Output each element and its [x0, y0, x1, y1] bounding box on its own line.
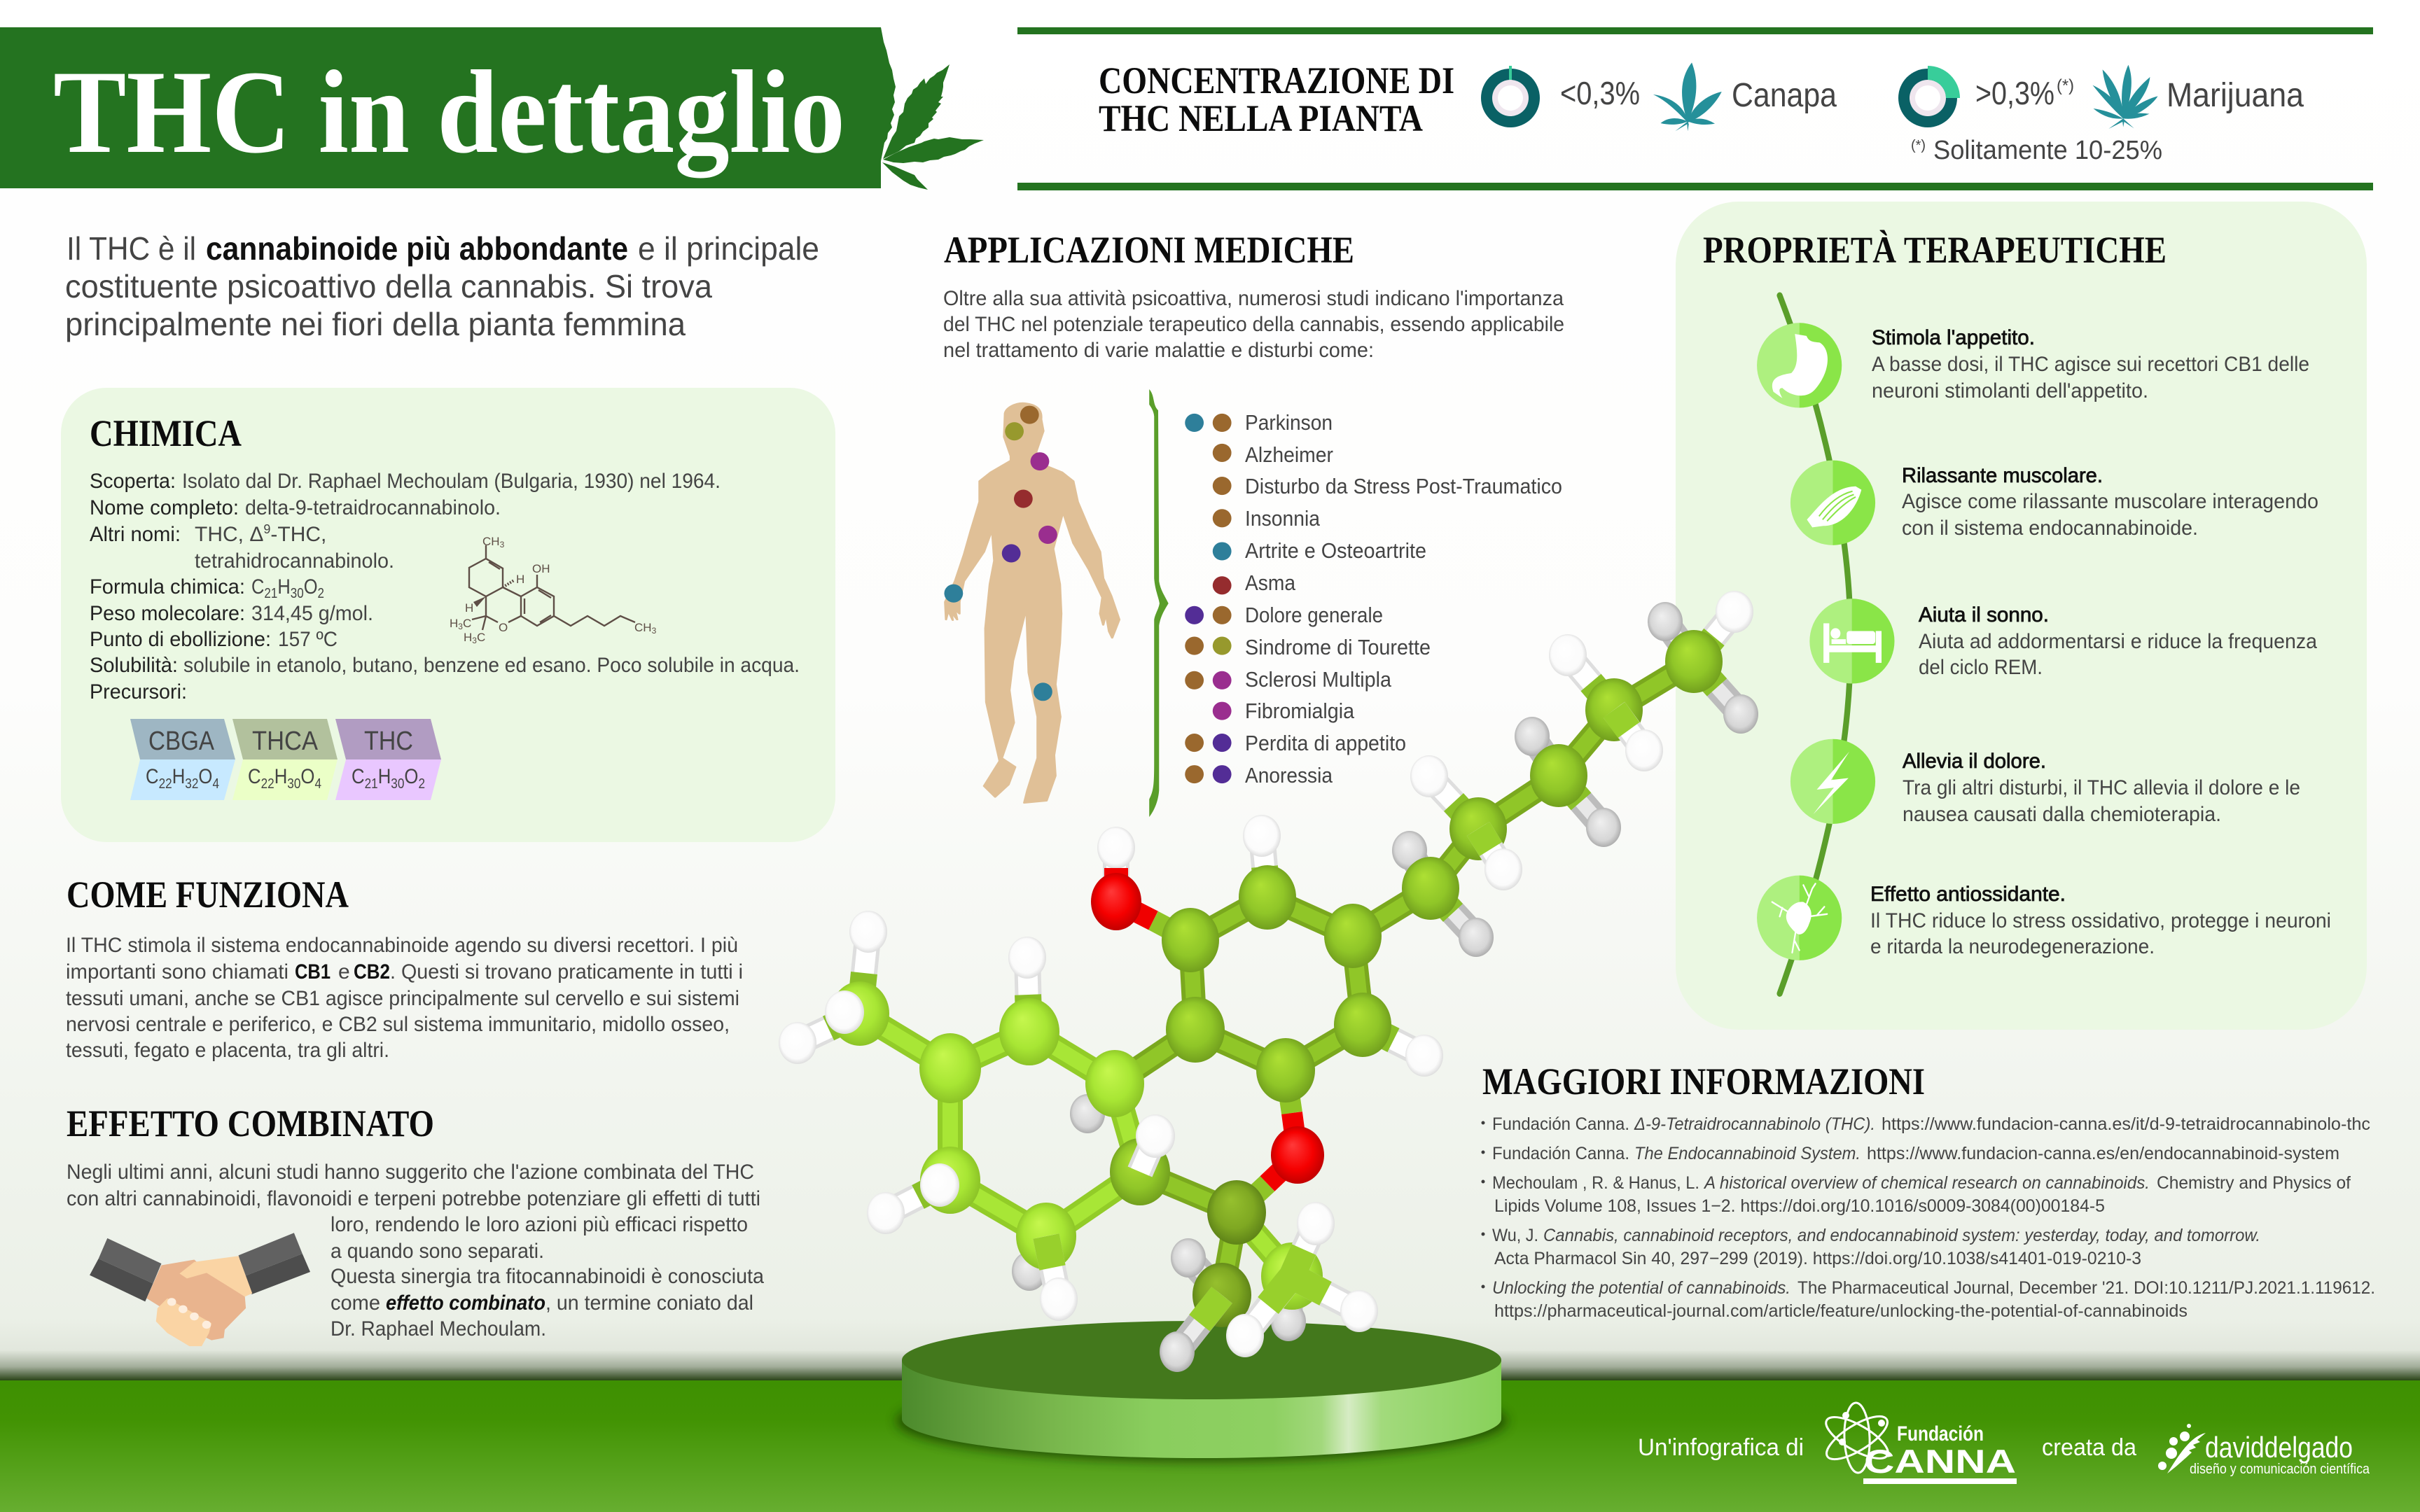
property: pain: [1903, 750, 2300, 826]
chemistry facts: 9: [263, 522, 270, 536]
back hydrogen bonds: [798, 612, 1741, 1322]
text: come funziona: CB1: [295, 960, 331, 983]
list of conditions: Parkinson: [1245, 410, 1333, 435]
chemistry facts: Solubilità:: [90, 654, 178, 677]
property: antioxidant: [1870, 883, 2331, 958]
intro text: [65, 230, 819, 342]
chart: skeletal formula of THC: H: [450, 617, 458, 630]
icon: hemp leaf: [1653, 62, 1722, 131]
heading: concentration: [1099, 59, 1454, 139]
logo: Fundación Canna: [1821, 1402, 2017, 1484]
precursor chevron: THCA: 4: [314, 776, 321, 792]
text: come funziona: e: [338, 960, 350, 983]
property: muscle relaxant: Rilassante muscolare.: [1902, 464, 2103, 487]
property: pain: Allevia il dolore.: [1903, 750, 2046, 773]
text: effetto combinato: come: [331, 1292, 380, 1315]
section: maggiori informazioni: [1482, 1060, 2375, 1321]
text: effetto combinato: effetto combinato: [386, 1292, 545, 1315]
property: appetite: Stimola l'appetito.: [1872, 326, 2035, 349]
carbon atoms: [830, 630, 1723, 1327]
chemistry facts: Nome completo:: [90, 496, 239, 519]
chemistry facts: O: [304, 575, 318, 598]
chart: skeletal formula of THC: 3: [652, 626, 657, 636]
icon: handshake: [90, 1233, 310, 1346]
carbon bond stubs toward back hydrogens: [828, 637, 1717, 1298]
list of conditions: Anoressia: [1245, 763, 1333, 788]
chemistry facts: 157 ºC: [278, 628, 338, 651]
banner with leaf edge: [0, 27, 896, 188]
chart: skeletal formula of THC: H: [465, 601, 473, 615]
property: muscle relaxant: Agisce come rilassante muscolare interagendo: [1902, 490, 2318, 513]
strip rules: [1017, 27, 2373, 190]
chemistry facts: 21: [264, 586, 277, 601]
text: effetto combinato: [67, 1161, 764, 1340]
reference list: Mechoulam , R. & Hanus, L.: [1492, 1173, 1699, 1193]
chemistry facts: Isolato dal Dr. Raphael Mechoulam (Bulgaria, 1930) nel 1964.: [182, 470, 721, 493]
chart: skeletal formula of THC: CH: [482, 535, 500, 548]
list of conditions: Dolore generale: [1245, 603, 1383, 627]
precursor chevron: THCA: [232, 719, 338, 800]
reference list: Acta Pharmacol Sin 40, 297−299 (2019). https://doi.org/10.1038/s41401-019-0210-3: [1494, 1249, 2141, 1268]
reference list: A historical overview of chemical research on cannabinoids.: [1703, 1173, 2150, 1193]
precursor chevron: CBGA: 32: [185, 776, 198, 792]
precursor chevron: THC: 2: [418, 776, 425, 792]
heading: effetto combinato: EFFETTO COMBINATO: [67, 1102, 434, 1144]
value: above 0.3 percent: (*): [2057, 76, 2074, 95]
list of conditions: Alzheimer: [1245, 442, 1333, 467]
chart: skeletal formula of THC: H: [464, 631, 472, 644]
text: effetto combinato: Negli ultimi anni, alcuni studi hanno suggerito che l'azione combinata del THC: [67, 1161, 754, 1184]
precursor chevron: THCA: THCA: [252, 727, 319, 756]
text: applicazioni intro: Oltre alla sua attività psicoattiva, numerosi studi indicano l'importanza: [943, 287, 1564, 310]
reference list: Fundación Canna.: [1492, 1114, 1629, 1134]
icon: marijuana leaf: [2093, 65, 2158, 129]
chart: skeletal formula of THC: H: [516, 573, 524, 586]
precursor chevron: THC: [335, 719, 441, 800]
reference list: Δ-9-Tetraidrocannabinolo (THC).: [1634, 1114, 1875, 1134]
intro text: principalmente nei fiori della pianta femmina: [65, 306, 686, 342]
property: appetite: A basse dosi, il THC agisce sui recettori CB1 delle: [1872, 353, 2309, 376]
intro text: e il principale: [638, 230, 819, 267]
text: come funziona: tessuti, fegato e placenta, tra gli altri.: [66, 1039, 389, 1062]
chemistry facts: Peso molecolare:: [90, 602, 245, 625]
property: pain: Tra gli altri disturbi, il THC allevia il dolore e le: [1903, 776, 2300, 799]
precursor chevron: THCA: H: [274, 765, 287, 788]
chart: skeletal formula of THC: OH: [532, 562, 550, 575]
icon: stomach: [1757, 323, 1842, 408]
property: pain: nausea causati dalla chemioterapia.: [1903, 803, 2221, 826]
panel: chimica: [61, 388, 835, 842]
precursor chevron: THCA: 22: [261, 776, 274, 792]
icon: muscle: [1790, 461, 1875, 545]
reference list: Fundación Canna.: [1492, 1144, 1629, 1163]
text: come funziona: nervosi centrale e periferico, e CB2 sul sistema immunitario, midollo osseo,: [66, 1013, 730, 1036]
value: above 0.3 percent: >0,3%: [1975, 75, 2054, 111]
chemistry facts: Altri nomi:: [90, 523, 181, 546]
property: muscle relaxant: [1902, 464, 2318, 540]
chemistry facts: solubile in etanolo, butano, benzene ed esano. Poco solubile in acqua.: [183, 654, 800, 677]
precursor chevron: THCA: O: [300, 765, 314, 788]
label: marijuana: Marijuana: [2167, 77, 2304, 114]
chemistry facts: Formula chimica:: [90, 575, 245, 598]
chemistry facts: Scoperta:: [90, 470, 176, 493]
logo: Fundación Canna: CANNA: [1864, 1443, 2016, 1480]
carbon-oxygen bonds: [1116, 868, 1298, 1212]
property: sleep: Aiuta il sonno.: [1919, 603, 2049, 626]
intro text: Il THC è il: [67, 230, 196, 267]
heading: chimica: CHIMICA: [90, 412, 242, 454]
chemistry facts: H: [277, 575, 291, 598]
reference list: Unlocking the potential of cannabinoids.: [1492, 1278, 1790, 1298]
logo: daviddelgado: daviddelgado: [2205, 1431, 2353, 1464]
list of conditions: Asma: [1245, 570, 1296, 595]
precursor chevron: THC: C: [352, 765, 367, 788]
reference list: Cannabis, cannabinoid receptors, and endocannabinoid system: yesterday, today, and tomorrow.: [1543, 1226, 2260, 1245]
precursor chevron: THCA: 30: [287, 776, 300, 792]
footnote: (*): [1911, 138, 1926, 153]
text: come funziona: Il THC stimola il sistema endocannabinoide agendo su diversi recettori. I più: [66, 934, 738, 957]
reference list: The Endocannabinoid System.: [1634, 1144, 1861, 1163]
text: effetto combinato: , un termine coniato dal: [545, 1292, 753, 1315]
donut chart: below 0.3 percent: [1481, 66, 1540, 127]
intro text: costituente psicoattivo della cannabis. Si trova: [65, 268, 712, 304]
chart: skeletal formula of THC: C: [463, 617, 471, 630]
text: applicazioni intro: nel trattamento di varie malattie e disturbi come:: [943, 339, 1374, 362]
property: sleep: del ciclo REM.: [1919, 656, 2043, 679]
precursor chevron: CBGA: 4: [212, 776, 219, 792]
property: appetite: neuroni stimolanti dell'appetito.: [1872, 379, 2148, 402]
carbon-carbon bonds: mid tone: [1115, 662, 1694, 1295]
chemistry facts: THC, Δ: [195, 523, 263, 546]
property: sleep: [1919, 603, 2317, 679]
section: effetto combinato: [67, 1102, 764, 1346]
footer credits: [1638, 1402, 2370, 1484]
chemistry facts: -THC,: [270, 523, 326, 546]
reference list: Lipids Volume 108, Issues 1−2. https://doi.org/10.1016/s0009-3084(00)00184-5: [1494, 1196, 2105, 1216]
precursor chevron: CBGA: CBGA: [148, 727, 215, 756]
connecting curve: [1780, 295, 1850, 993]
intro text: cannabinoide più abbondante: [206, 230, 628, 267]
logo: Fundación Canna: Fundación: [1897, 1422, 1984, 1446]
footer band: [0, 1380, 2420, 1512]
chemistry facts: C: [251, 575, 267, 598]
reference list: Chemistry and Physics of: [2157, 1173, 2351, 1193]
list of conditions: [1245, 410, 1562, 788]
chart: skeletal formula of THC: C: [477, 631, 485, 644]
text: come funziona: [66, 934, 743, 1062]
chemistry facts: 314,45 g/mol.: [251, 602, 373, 625]
list of conditions: Fibromialgia: [1245, 699, 1355, 723]
heading: proprietà terapeutiche: PROPRIETÀ TERAPEUTICHE: [1703, 229, 2167, 271]
THC 3D molecule: [779, 591, 1758, 1372]
chemistry facts: Precursori:: [90, 680, 187, 704]
heading: come funziona: COME FUNZIONA: [67, 874, 349, 916]
legend dots: [1185, 414, 1232, 783]
precursor chevron: THCA: C: [248, 765, 263, 788]
text: come funziona: importanti sono chiamati: [66, 960, 288, 983]
platform: [896, 1321, 1507, 1462]
precursor chevron: CBGA: O: [198, 765, 212, 788]
reference list: The Pharmaceutical Journal, December '21. DOI:10.1211/PJ.2021.1.119612.: [1797, 1278, 2375, 1298]
list of conditions: Sindrome di Tourette: [1245, 635, 1431, 659]
reference list: Wu, J.: [1492, 1226, 1538, 1245]
precursor chevron: CBGA: [130, 719, 235, 800]
list of conditions: Insonnia: [1245, 506, 1321, 531]
text: come funziona: CB2: [354, 960, 390, 983]
precursor chevron: CBGA: H: [172, 765, 185, 788]
oxygen atoms: [1091, 873, 1324, 1184]
reference list: https://www.fundacion-canna.es/en/endocannabinoid-system: [1867, 1144, 2339, 1163]
text: come funziona: tessuti umani, anche se CB1 agisce principalmente sul cervello e sui sistemi: [66, 987, 739, 1010]
footnote: Solitamente 10-25%: [1933, 136, 2162, 165]
text: come funziona: . Questi si trovano praticamente in tutti i: [390, 960, 743, 983]
list of conditions: Sclerosi Multipla: [1245, 667, 1392, 692]
icon: leaf leaflets: [882, 64, 984, 190]
chemistry facts: [90, 470, 800, 704]
precursor chevron: THC: THC: [364, 727, 413, 756]
donut chart: above 0.3 percent: [1898, 66, 1960, 127]
property: muscle relaxant: con il sistema endocannabinoide.: [1902, 517, 2198, 540]
back hydrogen atoms: [779, 591, 1758, 1341]
heading: maggiori informazioni: MAGGIORI INFORMAZIONI: [1482, 1060, 1925, 1102]
text: applicazioni intro: [943, 287, 1564, 362]
label: hemp: Canapa: [1732, 77, 1837, 114]
icon: bed: [1809, 598, 1895, 684]
text: effetto combinato: con altri cannabinoidi, flavonoidi e terpeni potrebbe potenziare gli effetti di tutti: [67, 1187, 760, 1210]
property: antioxidant: Effetto antiossidante.: [1870, 883, 2066, 906]
chart: skeletal formula of THC: CH: [634, 621, 652, 634]
heading: applicazioni mediche: APPLICAZIONI MEDICHE: [944, 229, 1354, 271]
icon: lightning: [1790, 739, 1875, 824]
reference list: https://www.fundacion-canna.es/it/d-9-tetraidrocannabinolo-thc: [1882, 1114, 2370, 1134]
section: come funziona: [66, 874, 743, 1062]
panel: proprietà terapeutiche: [1676, 202, 2367, 1030]
text: effetto combinato: a quando sono separati.: [331, 1240, 544, 1263]
credit text: infographic by: Un'infografica di: [1638, 1434, 1804, 1461]
property: antioxidant: Il THC riduce lo stress ossidativo, protegge i neuroni: [1870, 909, 2331, 932]
concentration strip: [1017, 27, 2373, 190]
chemistry facts: 2: [318, 586, 324, 601]
chart: skeletal formula of THC: 3: [500, 540, 505, 550]
logo: daviddelgado: [2158, 1424, 2370, 1477]
precursor chevron: THC: O: [404, 765, 418, 788]
front hydrogen bonds: [1046, 710, 1644, 1352]
text: effetto combinato: Dr. Raphael Mechoulam.: [331, 1317, 546, 1340]
chart: skeletal formula of THC: [450, 535, 657, 645]
chemistry facts: Punto di ebollizione:: [90, 628, 271, 651]
chemistry facts: tetrahidrocannabinolo.: [195, 550, 394, 573]
human body figure with markers: [944, 403, 1119, 803]
chart: skeletal formula of THC: 3: [472, 636, 477, 645]
property: antioxidant: e ritarda la neurodegenerazione.: [1870, 935, 2155, 958]
reference list: https://pharmaceutical-journal.com/article/feature/unlocking-the-potential-of-cannabinoids: [1494, 1301, 2188, 1321]
front hydrogen atoms: [825, 729, 1663, 1372]
precursor chevron: THC: 21: [365, 776, 378, 792]
list of conditions: Perdita di appetito: [1245, 731, 1406, 755]
precursor chevron: CBGA: 22: [159, 776, 172, 792]
text: effetto combinato: Questa sinergia tra fitocannabinoidi è conosciuta: [331, 1265, 764, 1288]
text: applicazioni intro: del THC nel potenziale terapeutico della cannabis, essendo applicabile: [943, 313, 1564, 336]
chart: skeletal formula of THC: O: [499, 621, 508, 634]
heading: concentration: CONCENTRAZIONE DI: [1099, 59, 1454, 102]
carbon-carbon bonds: bright tone: [860, 1014, 1292, 1276]
list of conditions: Artrite e Osteoartrite: [1245, 538, 1426, 563]
text: effetto combinato: loro, rendendo le loro azioni più efficaci rispetto: [331, 1213, 748, 1236]
title: THC in dettaglio: [53, 46, 845, 178]
curly brace: [1149, 389, 1169, 817]
value: below 0.3 percent: <0,3%: [1560, 75, 1640, 111]
property: appetite: [1872, 326, 2309, 402]
section: applicazioni mediche: [943, 229, 1564, 817]
chemistry facts: delta-9-tetraidrocannabinolo.: [245, 496, 501, 519]
precursor chevron: THC: 30: [391, 776, 404, 792]
list of conditions: Disturbo da Stress Post-Traumatico: [1245, 474, 1562, 498]
title banner: [0, 27, 984, 190]
heading: concentration: THC NELLA PIANTA: [1099, 97, 1423, 139]
precursor chevron: CBGA: C: [146, 765, 161, 788]
credit text: created by: creata da: [2042, 1434, 2136, 1461]
property: sleep: Aiuta ad addormentarsi e riduce la frequenza: [1919, 630, 2317, 653]
chart: skeletal formula of THC: 3: [458, 622, 463, 631]
logo: daviddelgado: diseño y comunicación científica: [2190, 1462, 2370, 1477]
reference list: [1482, 1114, 2375, 1321]
chemistry facts: 30: [291, 586, 304, 601]
icon: neuron: [1757, 876, 1842, 960]
precursor chevron: THC: H: [378, 765, 391, 788]
